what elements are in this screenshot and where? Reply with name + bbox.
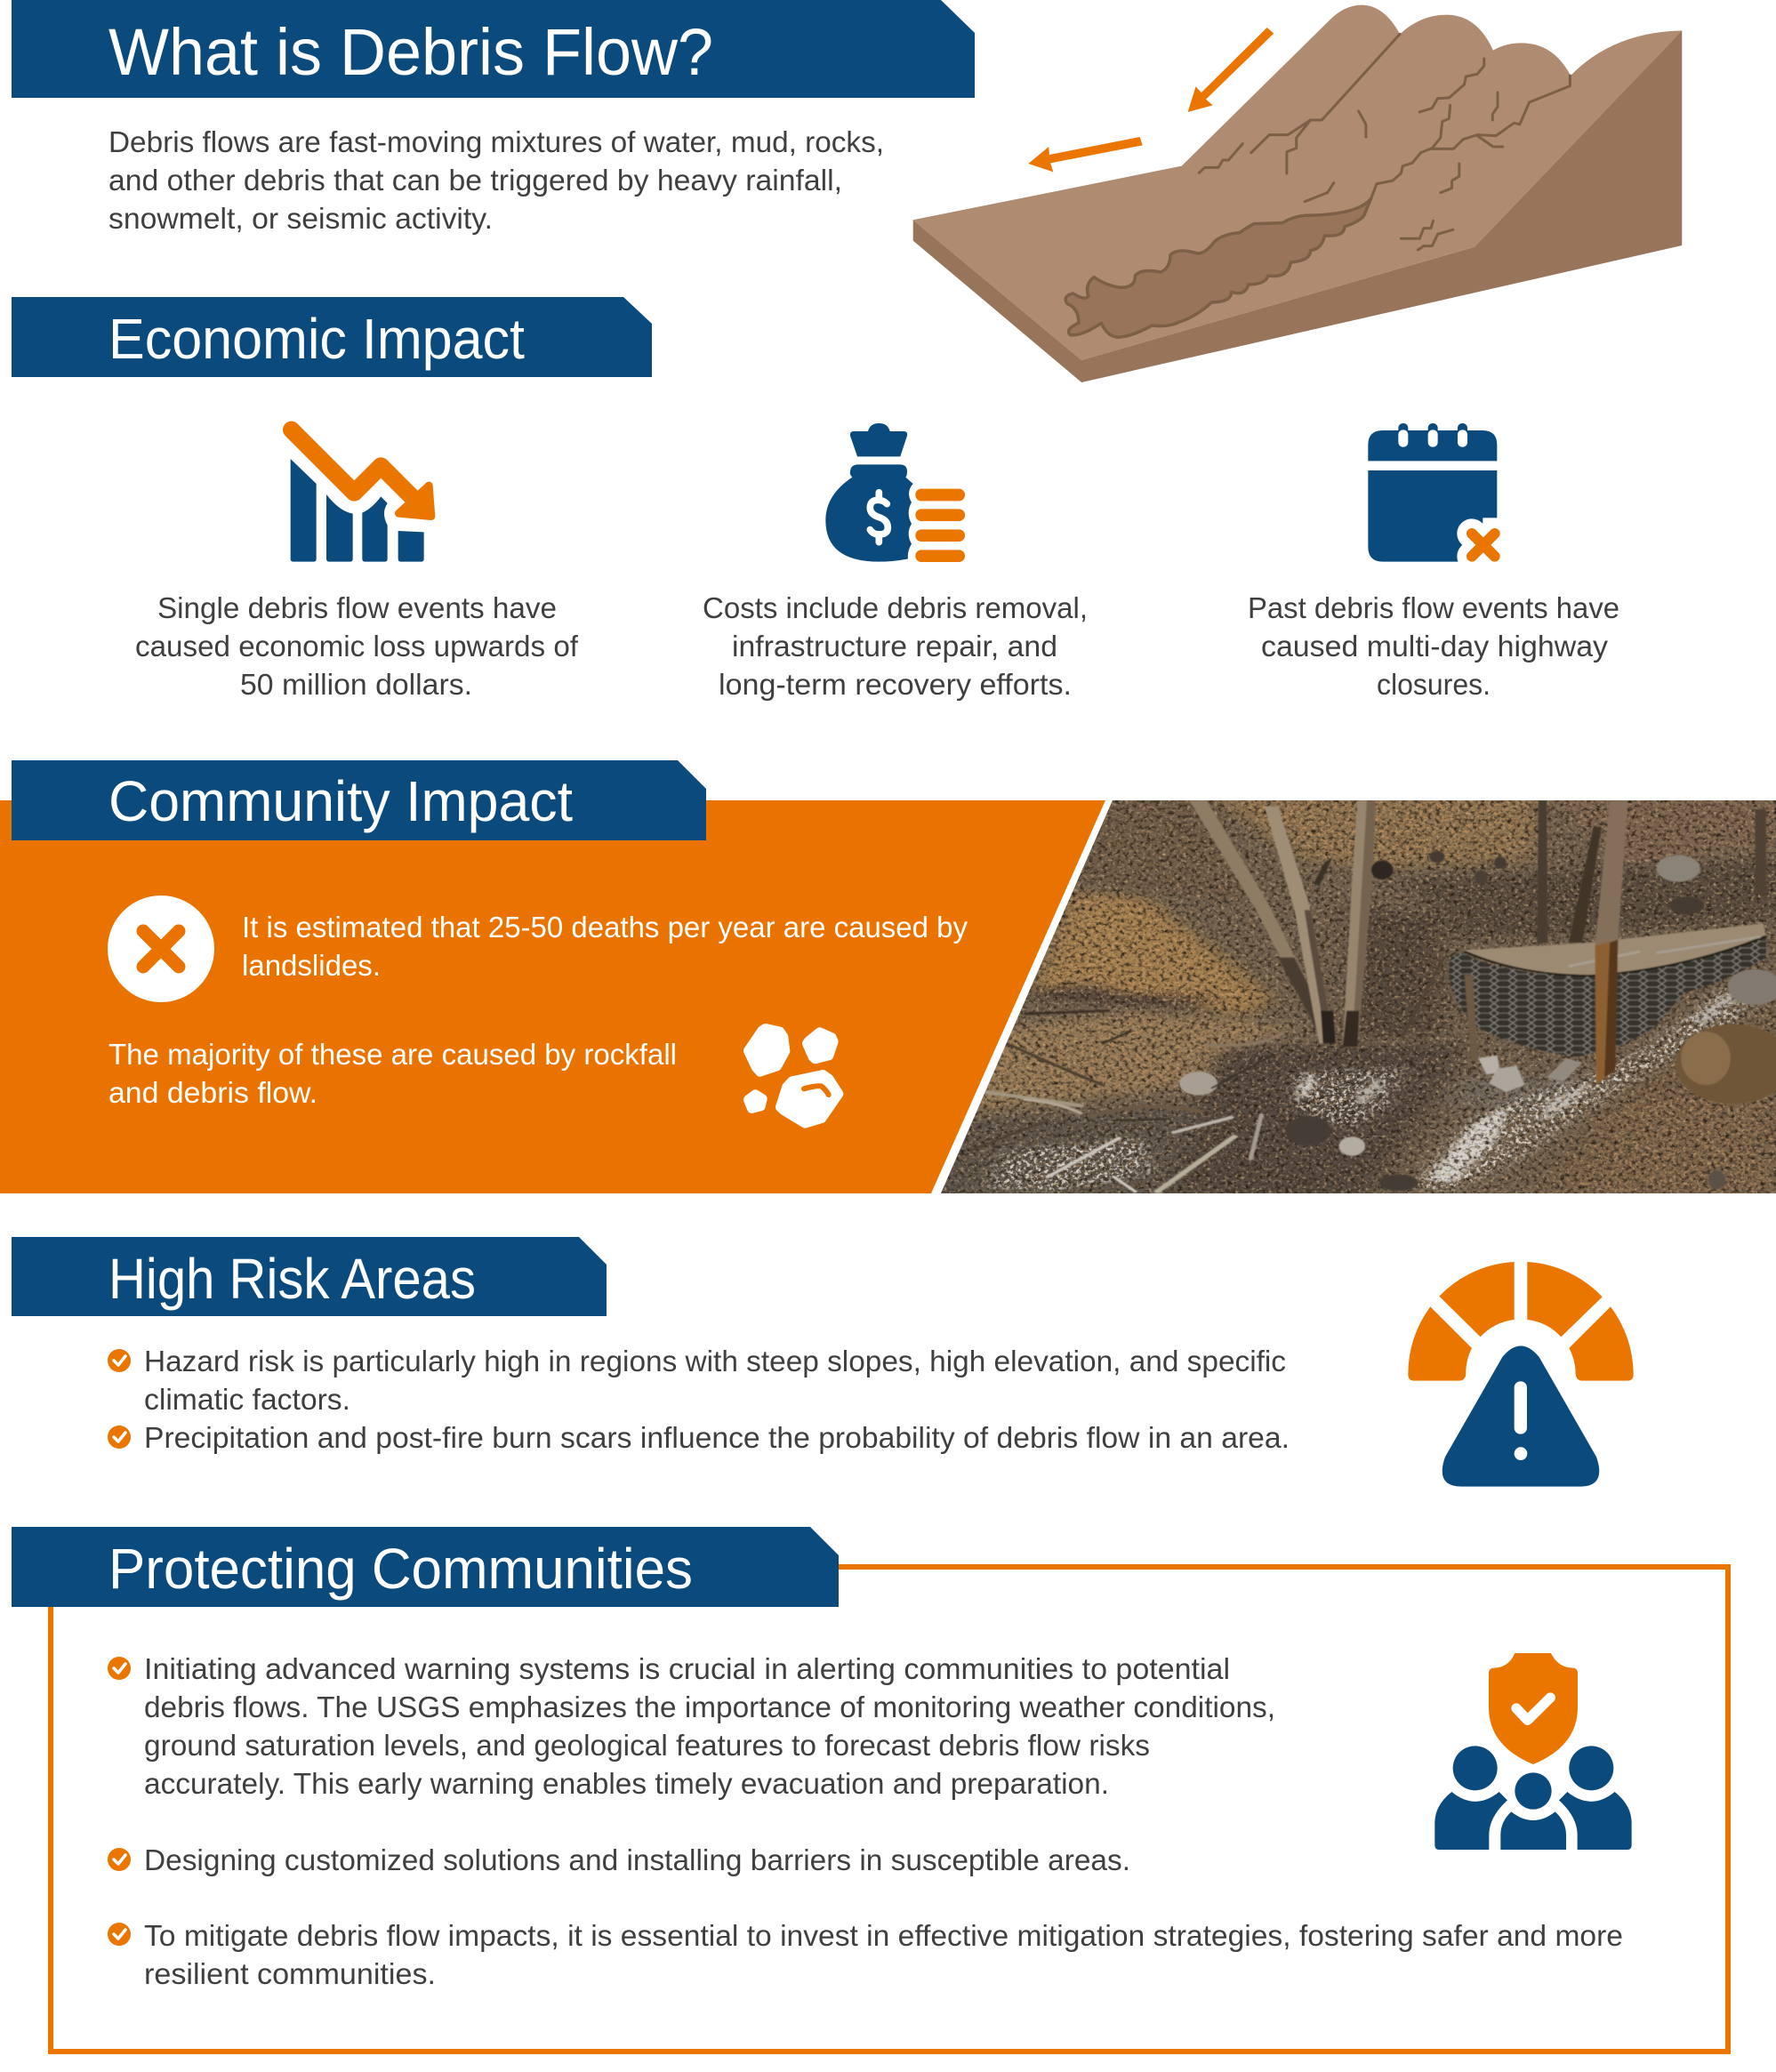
panel: highway closures [1248, 423, 1619, 701]
arrow: down slope [1188, 28, 1274, 112]
photo: fallen branches [971, 1011, 1281, 1192]
header: Economic Impact [12, 297, 652, 377]
panel: protecting communities border [51, 1567, 1728, 2052]
text: economic loss: 50 million dollars. [240, 668, 472, 701]
photo: grain texture [934, 800, 1776, 1193]
text: deaths per year [242, 911, 968, 982]
text: warning systems: debris flows. The USGS emphasizes the importance of monitoring weather conditions, [144, 1691, 1275, 1723]
text: economic loss: Single debris flow events have [157, 591, 557, 624]
text: warning systems: Initiating advanced warning systems is crucial in alerting communities to potential [144, 1652, 1230, 1685]
text: deaths per year: landslides. [242, 949, 381, 982]
panel: economic loss [135, 430, 579, 701]
header: Community Impact [12, 760, 706, 840]
text: custom solutions: Designing customized solutions and installing barriers in susceptible areas. [144, 1843, 1130, 1876]
hillside dark sides [913, 30, 1682, 382]
bullet: check [108, 1426, 131, 1449]
text: economic loss [135, 591, 579, 701]
icon: falling bar chart [291, 430, 431, 562]
text: rockfall and debris flow [108, 1038, 677, 1109]
header: Protecting Communities: Protecting Communities [108, 1537, 693, 1601]
arrow: along ground [1028, 137, 1143, 172]
header: What is Debris Flow?: What is Debris Flow? [108, 15, 713, 89]
panel: costs [703, 423, 1088, 701]
icon: money bag and coins [825, 423, 965, 562]
text: rockfall and debris flow: and debris flow. [108, 1076, 317, 1109]
text: highway closures: caused multi-day highway [1261, 630, 1609, 663]
icon: people with shield [1434, 1653, 1632, 1850]
photo: barrier sediment and mesh [1449, 923, 1766, 1056]
intro text block: Debris flows are fast-moving mixtures of water, mud, rocks, [108, 125, 884, 158]
intro text block: snowmelt, or seismic activity. [108, 202, 493, 235]
photo: dry grass speckle [976, 800, 1772, 1192]
intro text block [108, 125, 884, 235]
text: mitigation: To mitigate debris flow impacts, it is essential to invest in effective mitigation strategies, fostering safer and more [144, 1919, 1623, 1952]
text: mitigation [144, 1919, 1623, 1990]
text: warning systems [144, 1652, 1275, 1800]
bullet: check [108, 1848, 131, 1871]
icon: rocks [748, 1028, 839, 1123]
text: rockfall and debris flow: The majority of these are caused by rockfall [108, 1038, 677, 1071]
header: High Risk Areas [12, 1237, 607, 1316]
photo: rocks and boulders [1179, 851, 1776, 1191]
debris flow deposit [1065, 198, 1371, 337]
text: costs: long-term recovery efforts. [719, 668, 1072, 701]
bullet: check [108, 1657, 131, 1680]
text: hazard risk: Hazard risk is particularly high in regions with steep slopes, high elevation, and specific [144, 1345, 1286, 1377]
text: hazard risk: climatic factors. [144, 1383, 350, 1416]
list: high risk areas [108, 1345, 1290, 1454]
header: What is Debris Flow? [12, 0, 975, 98]
hillside cracks [1199, 34, 1570, 250]
photo: structures [971, 800, 1776, 1192]
text: hazard risk [144, 1345, 1286, 1416]
photo: pale streak highlights [1295, 990, 1741, 1183]
header: Economic Impact: Economic Impact [108, 307, 525, 371]
text: precipitation: Precipitation and post-fire burn scars influence the probability of debris flow in an area. [144, 1421, 1290, 1454]
header: High Risk Areas: High Risk Areas [108, 1247, 476, 1311]
text: highway closures: closures. [1377, 668, 1491, 701]
text: economic loss: caused economic loss upwards of [135, 630, 579, 663]
text: costs: infrastructure repair, and [732, 630, 1057, 663]
intro text block: and other debris that can be triggered by heavy rainfall, [108, 164, 842, 197]
header: Protecting Communities [12, 1527, 839, 1607]
panel: community impact orange band [0, 800, 1105, 1193]
bullet: check [108, 1349, 131, 1372]
text: costs: Costs include debris removal, [703, 591, 1088, 624]
text: mitigation: resilient communities. [144, 1957, 436, 1990]
illustration: debris flow hillside [913, 5, 1682, 382]
text: costs [703, 591, 1088, 701]
hillside top surface [913, 5, 1682, 360]
text: warning systems: ground saturation levels, and geological features to forecast debris flow risks [144, 1729, 1150, 1762]
photo: ground tones [927, 798, 1776, 1198]
photo: debris flow barrier in burned gully [927, 798, 1776, 1198]
text: highway closures: Past debris flow events have [1248, 591, 1619, 624]
text: warning systems: accurately. This early warning enables timely evacuation and preparation. [144, 1767, 1109, 1800]
header: Community Impact: Community Impact [108, 769, 573, 833]
list: protecting communities [108, 1652, 1623, 1990]
photo: tree trunks [1189, 800, 1766, 1085]
icon: risk gauge with warning triangle [1408, 1262, 1634, 1487]
icon: calendar with cross [1368, 423, 1500, 563]
icon: white circle with cross [108, 895, 214, 1002]
text: deaths per year: It is estimated that 25-50 deaths per year are caused by [242, 911, 968, 944]
photo: pale mineral speckle [987, 969, 1766, 1192]
bullet: check [108, 1923, 131, 1946]
text: highway closures [1248, 591, 1619, 701]
